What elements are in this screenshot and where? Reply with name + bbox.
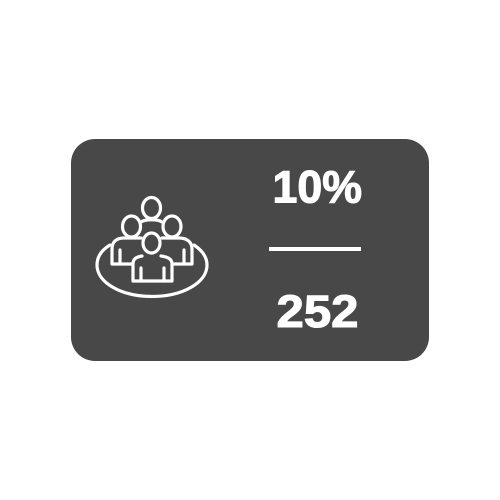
panel: stat card <box>71 139 429 361</box>
icon: group of people on an oval <box>97 198 207 296</box>
count value: 252 <box>276 286 358 337</box>
divider line <box>269 247 361 251</box>
percentage value: 10% <box>272 162 362 212</box>
